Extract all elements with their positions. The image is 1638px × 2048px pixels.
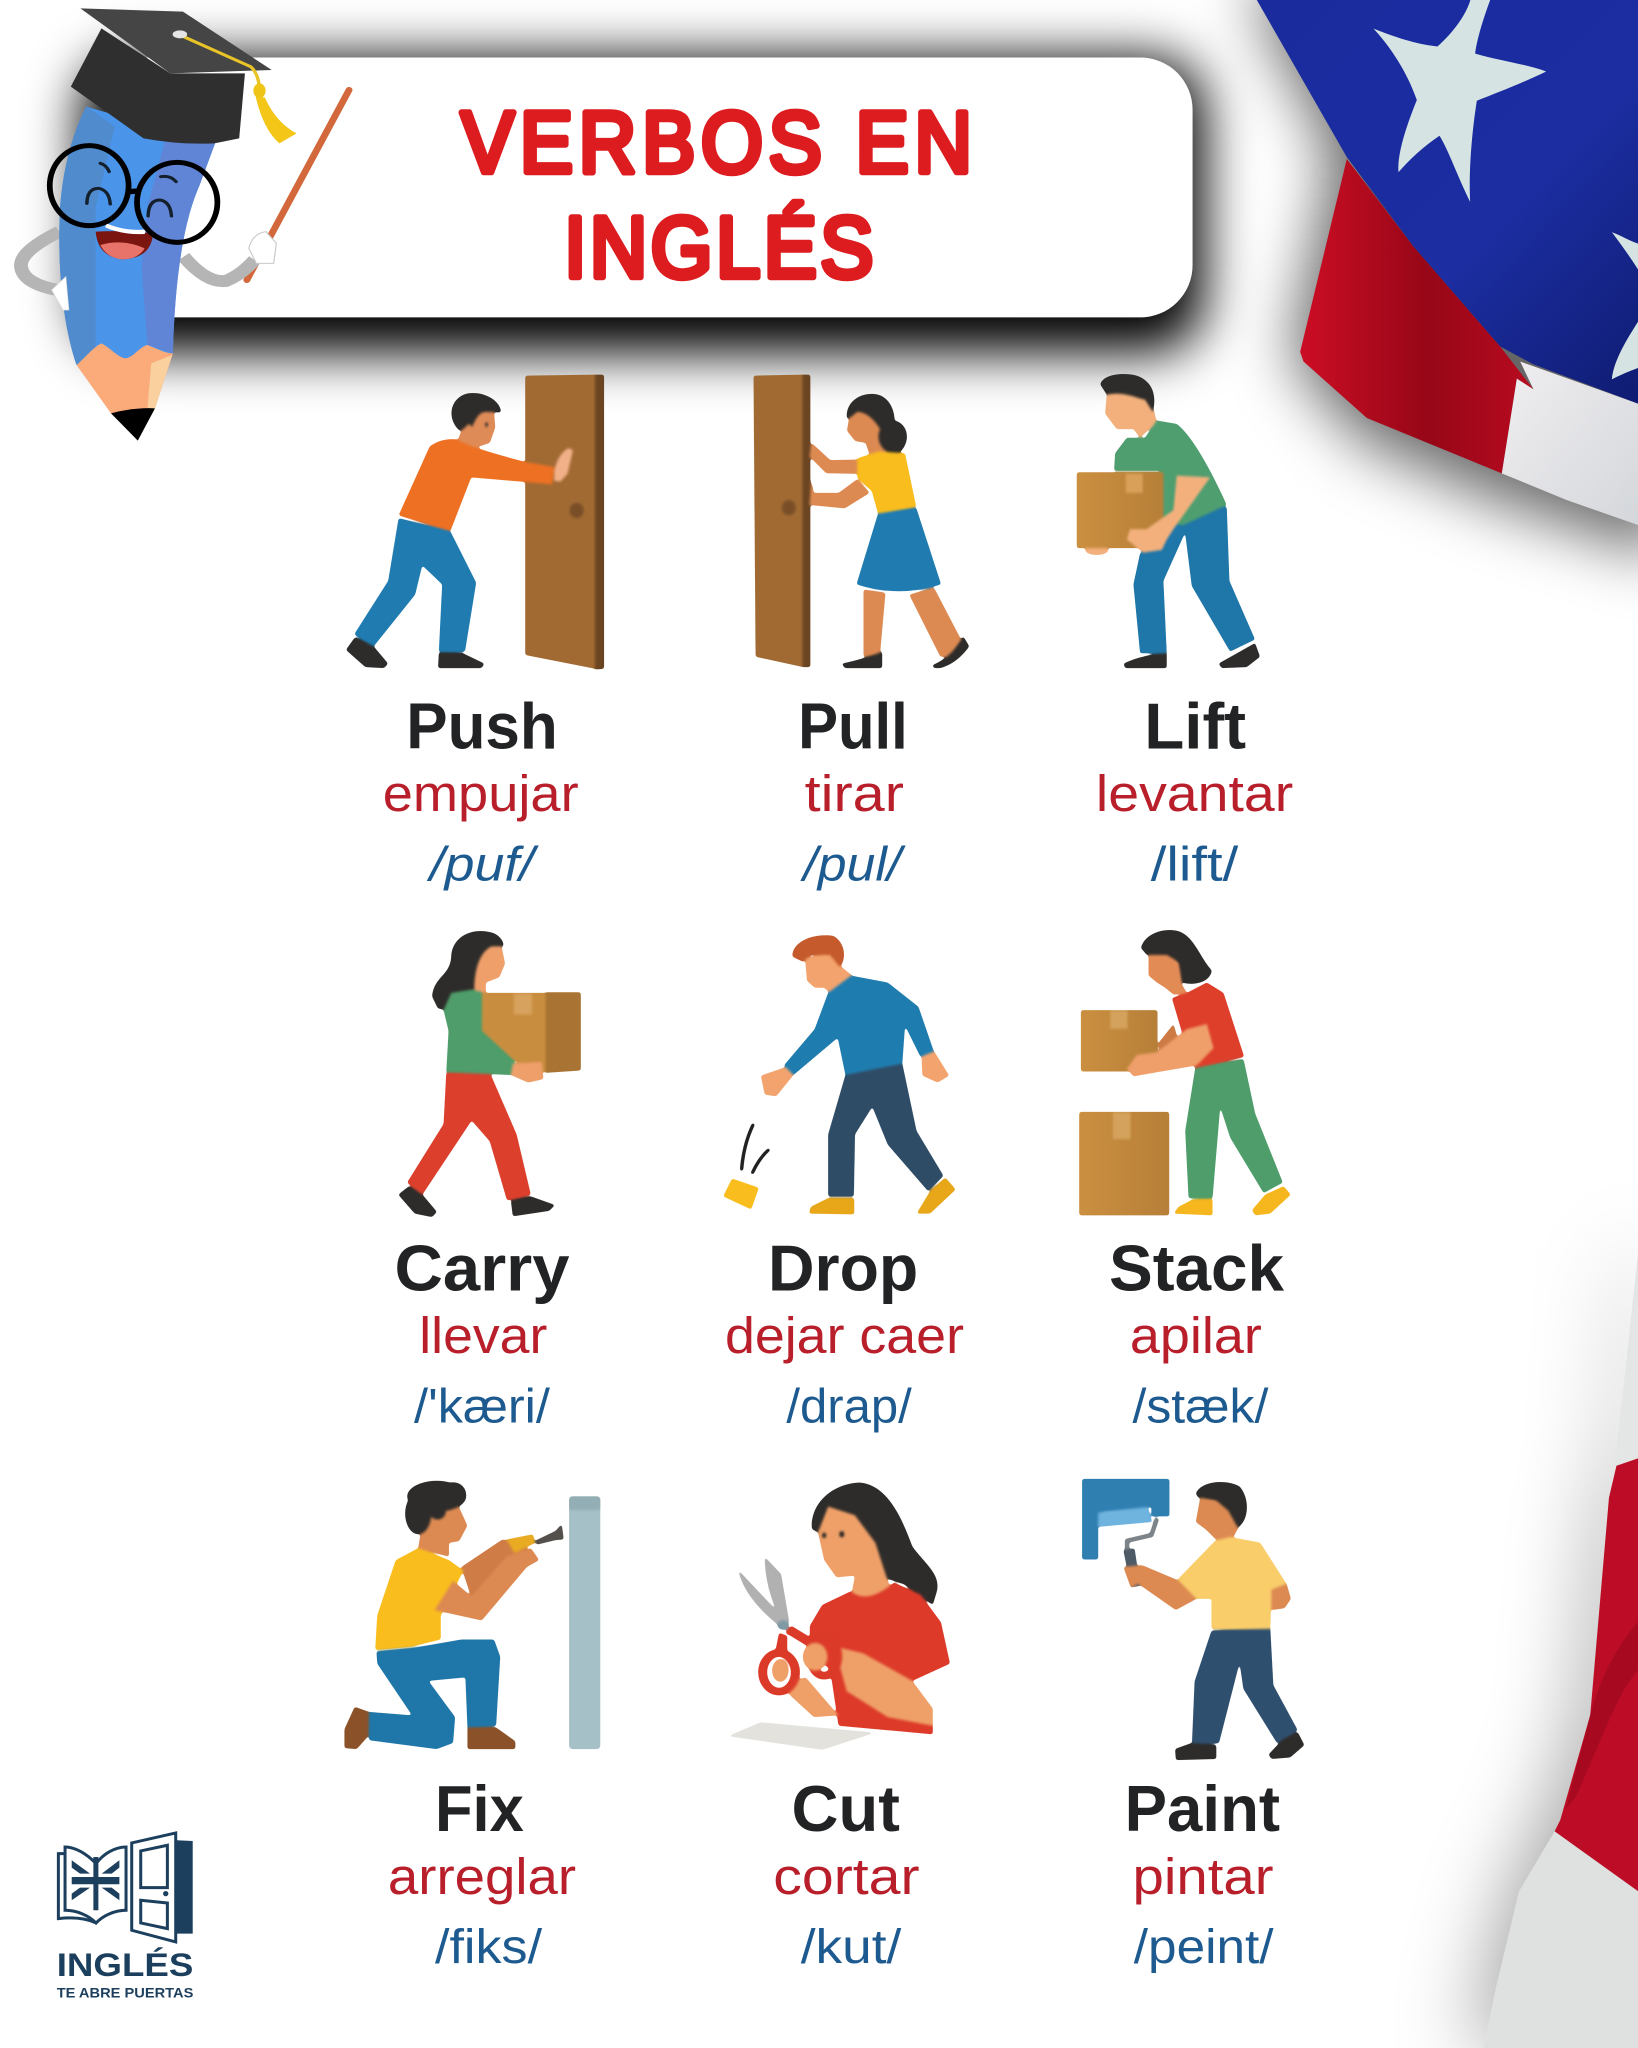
word: Lift (1144, 689, 1246, 762)
verb card: Drop (723, 935, 964, 1433)
translation: cortar (773, 1848, 920, 1905)
word: Stack (1109, 1231, 1285, 1304)
title banner (131, 57, 1193, 317)
flag shadow (1247, 0, 1638, 557)
illustration: woman stacking boxes (1079, 930, 1291, 1215)
pointer stick (247, 90, 349, 280)
wood highlight (147, 355, 172, 409)
logo: Inglés te abre puertas (57, 1833, 193, 2000)
graphite tip (111, 408, 155, 441)
word: Drop (768, 1231, 918, 1304)
pencil left shade (59, 107, 115, 365)
verb card: Carry (394, 931, 581, 1433)
pencil wood tip (77, 343, 173, 413)
translation: empujar (383, 765, 579, 822)
arms (21, 232, 255, 290)
hands (52, 277, 69, 310)
verb card: Cut (728, 1483, 950, 1974)
word: Fix (435, 1772, 524, 1845)
verb card: Paint (1082, 1479, 1304, 1974)
logo tagline: TE ABRE PUERTAS (57, 1984, 193, 2000)
translation: apilar (1130, 1307, 1262, 1364)
eyes (87, 163, 176, 216)
illustration: man painting wall with roller (1082, 1479, 1304, 1760)
mouth (96, 231, 153, 259)
pencil right shade (142, 140, 215, 353)
translation: levantar (1096, 765, 1293, 822)
pencil body (59, 107, 215, 365)
verb card: Push (346, 375, 604, 891)
flag fabric and stars (1257, 0, 1638, 525)
translation: tirar (805, 765, 904, 822)
title line 2: INGLÉS (564, 199, 877, 296)
illustration: man lifting box (1077, 374, 1260, 668)
word: Paint (1125, 1772, 1280, 1845)
illustration: woman carrying box (398, 931, 581, 1217)
translation: dejar caer (725, 1307, 964, 1364)
pronunciation: /lift/ (1151, 837, 1239, 891)
title line 1: VERBOS EN (461, 94, 978, 190)
verb card: Fix (344, 1481, 600, 1974)
word: Carry (394, 1231, 570, 1304)
pronunciation: /fiks/ (435, 1920, 543, 1974)
cap tassel (180, 35, 259, 88)
pronunciation: /pul/ (800, 837, 906, 891)
pronunciation: /peint/ (1134, 1920, 1274, 1974)
flag: top right corner (1247, 0, 1638, 557)
pronunciation: /puf/ (426, 837, 539, 891)
pronunciation: /drap/ (786, 1379, 912, 1433)
word: Cut (792, 1772, 900, 1845)
illustration: man fixing with drill (344, 1481, 600, 1749)
word: Push (406, 689, 558, 762)
pronunciation: /'kæri/ (414, 1379, 551, 1433)
verb card: Stack (1079, 930, 1291, 1433)
banner panel (131, 57, 1193, 317)
illustration: woman cutting with scissors (728, 1483, 950, 1750)
graduation cap (71, 28, 245, 144)
lower flag shadow (1474, 1250, 1638, 2048)
verb card: Lift (1077, 374, 1293, 891)
pronunciation: /kut/ (801, 1920, 902, 1974)
glasses (129, 183, 138, 200)
pencil mascot (21, 8, 349, 441)
pronunciation: /stæk/ (1132, 1379, 1269, 1433)
teeth (105, 223, 146, 234)
illustration: man pushing door (346, 375, 604, 670)
flag: bottom right corner (1474, 1250, 1638, 2048)
icon: open door (177, 1840, 193, 1934)
logo word: INGLÉS (57, 1947, 193, 1983)
translation: pintar (1132, 1848, 1274, 1905)
word: Pull (798, 689, 908, 762)
illustration: man dropping object (723, 935, 956, 1214)
lower flag fabric (1483, 1250, 1638, 2048)
title banner shadow (81, 57, 1204, 353)
verb card: Pull (754, 375, 969, 891)
icon: book with UK flag (58, 1847, 126, 1923)
translation: llevar (419, 1307, 547, 1364)
illustration: woman pulling door (754, 375, 969, 668)
tongue (100, 242, 145, 259)
translation: arreglar (388, 1848, 576, 1905)
